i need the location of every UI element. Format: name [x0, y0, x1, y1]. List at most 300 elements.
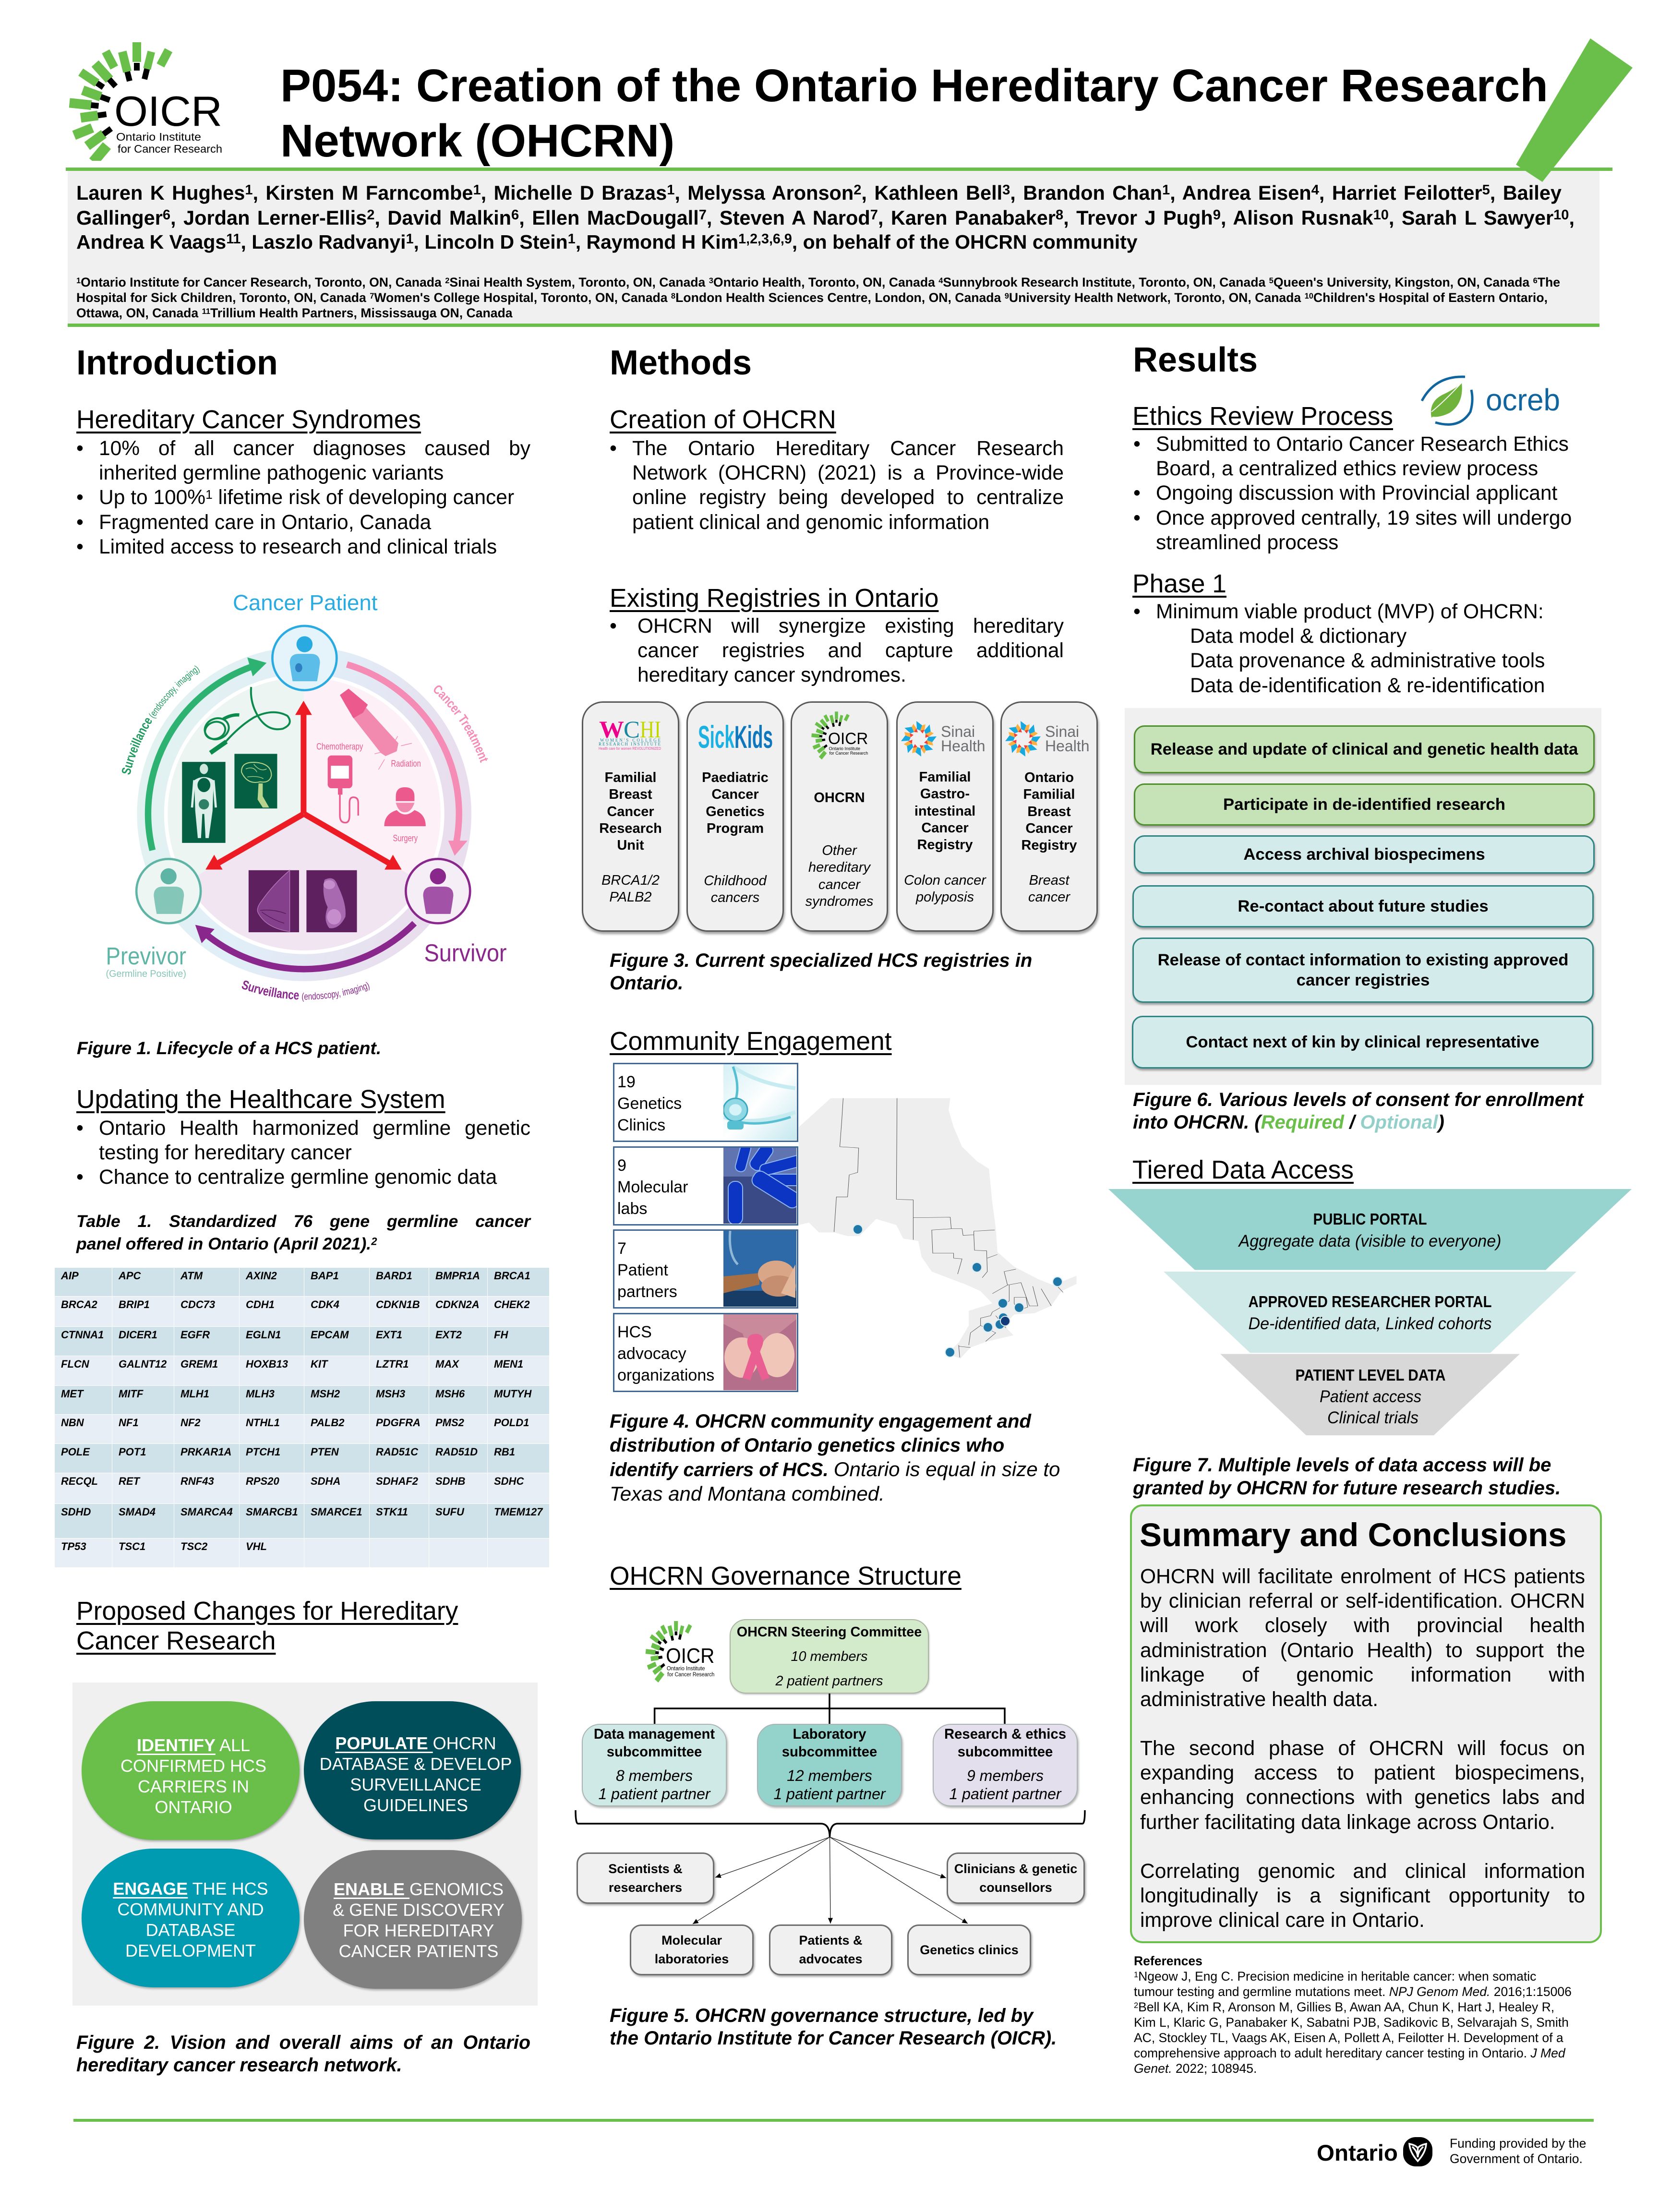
consent: contact information: Release of contact information to existing approved	[1158, 951, 1568, 969]
connector: committee tree	[655, 1693, 1005, 1724]
card: OHCRN	[791, 701, 888, 932]
caption: figure 3: Figure 3. Current specialized HCS registries in	[610, 950, 1032, 971]
references: 1Ngeow J, Eng C. Precision medicine in heritable cancer: when somatic	[1134, 1969, 1536, 1984]
heading: Tiered Data Access: Tiered Data Access	[1132, 1156, 1354, 1184]
bullet list: registries	[610, 614, 1064, 688]
table: 76 gene germline panel: SDHAF2	[376, 1475, 418, 1487]
bullet list: phase 1: Data model & dictionary	[1190, 625, 1407, 648]
card: Ontario familial breast cancer registry	[1000, 701, 1098, 932]
aim: identify: CONFIRMED HCS	[120, 1756, 266, 1776]
table: 76 gene germline panel: GALNT12	[119, 1358, 167, 1370]
heading: Existing Registries: Existing Registries in Ontario	[610, 584, 938, 613]
text: registry name: Cancer	[711, 787, 759, 802]
logo: OICR small: OICR	[828, 730, 868, 748]
table: 76 gene germline panel: SDHB	[435, 1475, 465, 1487]
table: 76 gene germline panel: AXIN2	[246, 1270, 277, 1282]
caption: figure 6: Figure 6. Various levels of consent for enrollment	[1133, 1089, 1584, 1110]
table: 76 gene germline panel: SMARCA4	[180, 1506, 233, 1518]
label: Germline Positive: (Germline Positive)	[106, 969, 186, 979]
table: 76 gene germline panel: NF1	[119, 1417, 139, 1429]
table: 76 gene germline panel: RAD51D	[435, 1446, 478, 1458]
table: 76 gene germline panel: POLE	[61, 1446, 90, 1458]
caption: figure 6: into OHCRN. (Required / Optional)	[1133, 1112, 1444, 1133]
image: pink ribbon	[723, 1314, 796, 1390]
table: 76 gene germline panel: BRCA1	[494, 1270, 530, 1282]
text: registry focus: hereditary	[808, 860, 870, 875]
text: registry name	[898, 769, 992, 854]
references: 2Bell KA, Kim R, Aronson M, Gillies B, Awan AA, Chun K, Hart J, Healey R,	[1134, 2000, 1554, 2014]
text: count: Molecular	[617, 1178, 688, 1196]
text: paragraph 3	[1140, 1859, 1585, 1933]
table: 76 gene germline panel: CDKN1B	[376, 1298, 420, 1310]
text: registry name: Genetics	[706, 804, 765, 819]
table: 76 gene germline panel: MITF	[119, 1388, 143, 1400]
image: stethoscope	[723, 1064, 796, 1140]
authors	[76, 181, 1575, 253]
text: registry name: Familial	[605, 770, 657, 785]
caption: table 1: Table 1. Standardized 76 gene germline cancer	[76, 1212, 530, 1231]
box: steering committee: 2 patient partners	[775, 1673, 883, 1689]
label: cancer treatment: Cancer Treatment	[434, 685, 488, 763]
text: paragraph 1	[1140, 1564, 1585, 1712]
bullet list: syndromes: •	[76, 536, 84, 558]
consent: de-identified research: Participate in de-identified research	[1223, 795, 1505, 814]
box: research and ethics: Research & ethics	[944, 1726, 1066, 1742]
author panel background	[68, 171, 1599, 324]
title: P054: Creation of the Ontario Hereditary Cancer Research	[280, 60, 1548, 111]
text: registry name: Ontario	[1024, 770, 1074, 785]
label: surveillance bottom: Surveillance	[242, 980, 299, 999]
section heading: Methods: Methods	[610, 344, 752, 382]
logo: OICR small	[792, 708, 887, 760]
box: research and ethics: subcommittee	[958, 1744, 1053, 1760]
funnel: patient level data: Clinical trials	[1327, 1408, 1419, 1427]
table: 76 gene germline panel: VHL	[246, 1540, 267, 1552]
bullet list: ethics	[1133, 432, 1594, 555]
logo: OICR governance: for Cancer Research	[667, 1672, 714, 1678]
box: laboratory: 12 members	[787, 1767, 872, 1784]
table: 76 gene germline panel: AIP	[61, 1270, 79, 1282]
panel: figure 2 aims	[72, 1683, 538, 2006]
aim: enable	[304, 1850, 522, 1989]
logo: OICR governance: Ontario Institute	[667, 1666, 705, 1672]
logo: OICR small: Ontario Institute	[829, 746, 860, 751]
footer: funding statement: Government of Ontario.	[1450, 2152, 1583, 2166]
footer: funding statement: Funding provided by the	[1450, 2136, 1586, 2151]
bullet list: creation: online registry being developed to centralize	[632, 486, 1064, 509]
logo: Sinai Health: Health	[941, 737, 985, 755]
text: count	[617, 1155, 688, 1220]
table: 76 gene germline panel: FLCN	[61, 1358, 89, 1370]
table: 76 gene germline panel	[55, 1268, 549, 1567]
text: registry name: Registry	[917, 837, 973, 853]
consent: release clinical data	[1134, 725, 1595, 773]
text: count	[617, 1322, 714, 1386]
caption: figure 7: Figure 7. Multiple levels of data access will be	[1133, 1455, 1551, 1476]
card: familial breast cancer research unit	[582, 701, 679, 932]
arrow: pink treatment arc	[347, 664, 468, 856]
table: 76 gene germline panel: TMEM127	[494, 1506, 542, 1518]
caption: figure 7: granted by OHCRN for future research studies.	[1133, 1478, 1561, 1499]
aim: engage: COMMUNITY AND	[117, 1899, 264, 1919]
logo: OICR governance: OICR	[666, 1644, 714, 1667]
table: 76 gene germline panel: MEN1	[494, 1358, 523, 1370]
title	[280, 60, 1548, 167]
text: registry name: Registry	[1021, 838, 1077, 853]
bullet list: registries: OHCRN will synergize existing hereditary	[637, 615, 1064, 637]
table: 76 gene germline panel: EPCAM	[311, 1329, 349, 1341]
box: scientists: researchers	[609, 1880, 682, 1894]
map: Ontario genetics clinics	[799, 1098, 1077, 1358]
table: 76 gene germline panel: EXT1	[376, 1329, 402, 1341]
table: 76 gene germline panel: RPS20	[246, 1475, 279, 1487]
icon: green leaf accent	[1516, 38, 1633, 182]
label: endoscopy imaging left: (endoscopy, imaging)	[149, 665, 200, 719]
funnel: patient level data: Patient access	[1320, 1387, 1421, 1406]
heading: Proposed Changes	[76, 1597, 458, 1655]
table: 76 gene germline panel: LZTR1	[376, 1358, 409, 1370]
bullet list: creation: patient clinical and genomic information	[632, 511, 989, 534]
text: registry focus: cancer	[818, 877, 860, 892]
bullet list: creation: The Ontario Hereditary Cancer Research	[632, 437, 1064, 460]
logo: Sinai Health: Health	[1045, 737, 1090, 755]
text: registry name: Breast	[609, 787, 652, 802]
text: paragraph 1: linkage of genomic information with	[1140, 1664, 1585, 1686]
image: holding hands	[723, 1231, 796, 1307]
label: Surgery: Surgery	[393, 833, 418, 844]
table: 76 gene germline panel: KIT	[311, 1358, 327, 1370]
heading: Ethics Review Process: Ethics Review Process	[1132, 402, 1393, 431]
table: 76 gene germline panel: BRIP1	[119, 1298, 150, 1310]
table: 76 gene germline panel: CDK4	[311, 1298, 339, 1310]
text: count: Genetics	[617, 1094, 682, 1113]
funnel: approved researcher portal: APPROVED RESEARCHER PORTAL	[1248, 1293, 1492, 1310]
box: genetics clinics	[907, 1924, 1031, 1975]
image: kidney scan	[306, 870, 357, 932]
logo: WCHRI: WOMEN'S COLLEGE	[600, 738, 661, 743]
consent: next of kin	[1132, 1016, 1593, 1069]
text: registry name: Research	[599, 821, 662, 836]
footer: Ontario wordmark: Ontario	[1317, 2140, 1398, 2166]
box: data management: 1 patient partner	[598, 1785, 710, 1803]
table: 76 gene germline panel: CTNNA1	[61, 1329, 104, 1341]
text: registry name: Unit	[617, 838, 644, 853]
panel: figure 6 consent	[1125, 708, 1601, 1085]
authors: Lauren K Hughes1, Kirsten M Farncombe1, Michelle D Brazas1, Melyssa Aronson2, Kathleen Bell3, Brandon Chan1, Andrea Eisen4, Harriet Feilotter5, Bailey	[76, 181, 1562, 204]
logo: WCHRI: W	[599, 716, 624, 743]
table: 76 gene germline panel: MSH3	[376, 1388, 405, 1400]
box: genetics clinics: Genetics clinics	[920, 1942, 1019, 1957]
text: paragraph 2: further facilitating data linkage across Ontario.	[1140, 1811, 1555, 1834]
table: 76 gene germline panel: ATM	[180, 1270, 203, 1282]
caption: figure 4: identify carriers of HCS. Ontario is equal in size to	[610, 1458, 1060, 1480]
text: paragraph 1: by clinician referral or self-identification. OHCRN	[1140, 1590, 1585, 1612]
bullet list: registries: cancer registries and capture additional	[637, 639, 1064, 662]
table: 76 gene germline panel: TP53	[61, 1540, 86, 1552]
caption: figure 4: distribution of Ontario genetics clinics who	[610, 1435, 1004, 1456]
logo: OICR small: for Cancer Research	[830, 751, 868, 756]
bullet list: phase 1: Data de-identification & re-identification	[1190, 674, 1545, 697]
logo: ocreb	[1414, 372, 1567, 430]
bullet list: syndromes: Up to 100%1 lifetime risk of developing cancer	[99, 486, 514, 509]
icon: surgeon	[384, 787, 426, 826]
table: 76 gene germline panel: APC	[119, 1270, 141, 1282]
text: count: Clinics	[617, 1116, 665, 1134]
table: 76 gene germline panel: SDHD	[61, 1506, 91, 1518]
bullet list: healthcare system: •	[76, 1117, 84, 1140]
label: Chemotherapy: Chemotherapy	[316, 742, 363, 752]
sector: surveillance	[168, 677, 304, 882]
text: registry name: Program	[707, 821, 764, 836]
box: clinicians: Clinicians & genetic	[954, 1862, 1077, 1876]
table: 76 gene germline panel: CDH1	[246, 1298, 275, 1310]
bullet list: healthcare system: Ontario Health harmonized germline genetic	[99, 1117, 530, 1140]
text: count: advocacy	[617, 1345, 686, 1363]
text: registry focus: Breast	[1029, 873, 1069, 888]
text: registry focus: cancer	[1028, 890, 1070, 905]
bullet list: syndromes: •	[76, 437, 84, 460]
header: title band	[66, 60, 1612, 327]
text: registry name: intestinal	[914, 804, 975, 819]
text: count: labs	[617, 1200, 647, 1218]
funnel: approved researcher portal: De-identified data, Linked cohorts	[1248, 1314, 1492, 1333]
caption: figure 3: Ontario.	[610, 973, 683, 994]
consent: biospecimens	[1134, 835, 1595, 874]
heading: Hereditary Cancer Syndromes: Hereditary Cancer Syndromes	[76, 406, 421, 434]
logo: OICR: OICR	[114, 87, 222, 135]
text: registry name: Breast	[1027, 804, 1071, 819]
card: familial gastro-intestinal cancer registry	[896, 701, 994, 932]
box: patients: Patients &	[799, 1933, 863, 1948]
caption: figure 4	[610, 1409, 1060, 1506]
box: laboratory: 1 patient partner	[773, 1785, 886, 1803]
image: DNA tubes	[723, 1148, 796, 1224]
funnel: patient level data	[1220, 1354, 1520, 1435]
caption: figure 1: Figure 1. Lifecycle of a HCS patient.	[77, 1038, 381, 1058]
text: count: 9	[617, 1156, 626, 1175]
logo: WCHRI	[583, 708, 678, 760]
bullet list: syndromes: inherited germline pathogenic variants	[99, 462, 444, 484]
text: registry focus: cancers	[711, 890, 759, 905]
table: 76 gene germline panel: RB1	[494, 1446, 515, 1458]
table: 76 gene germline panel: NF2	[180, 1417, 201, 1429]
aim: enable: FOR HEREDITARY	[343, 1921, 494, 1940]
table: 76 gene germline panel: HOXB13	[246, 1358, 288, 1370]
chart: lifecycle of a HCS patient	[106, 590, 507, 1002]
authors: Andrea K Vaags11, Laszlo Radvanyi1, Lincoln D Stein1, Raymond H Kim1,2,3,6,9, on behalf of the OHCRN community	[76, 231, 1138, 253]
logo: OICR: for Cancer Research	[118, 143, 222, 155]
box: steering committee: OHCRN Steering Committee	[737, 1624, 922, 1640]
table: 76 gene germline panel: MLH1	[180, 1388, 209, 1400]
text: registry focus	[583, 872, 678, 906]
label: Cancer Patient: Cancer Patient	[233, 590, 378, 615]
heading: Community Engagement: Community Engagement	[610, 1027, 892, 1056]
text: registry name	[583, 769, 678, 854]
heading: Governance: OHCRN Governance Structure	[610, 1562, 962, 1590]
aim: engage: DATABASE	[146, 1920, 235, 1940]
box: data management: 8 members	[616, 1767, 693, 1784]
consent: contact information: cancer registries	[1297, 971, 1430, 989]
footer: funding statement	[1450, 2136, 1586, 2166]
table: 76 gene germline panel: POT1	[119, 1446, 146, 1458]
caption: figure 2: Figure 2. Vision and overall aims of an Ontario	[76, 2032, 530, 2053]
text: count: organizations	[617, 1366, 714, 1384]
text: count	[617, 1238, 677, 1303]
label: Survivor: Survivor	[424, 939, 507, 966]
aim: identify: CARRIERS IN	[138, 1777, 249, 1796]
table: 76 gene germline panel: RET	[119, 1475, 140, 1487]
table: 76 gene germline panel: RNF43	[180, 1475, 214, 1487]
text: registry name: Cancer	[607, 804, 654, 819]
logo: OICR governance	[646, 1621, 714, 1683]
table: 76 gene germline panel: DICER1	[119, 1329, 157, 1341]
logo: WCHRI: RESEARCH INSTITUTE	[599, 742, 661, 746]
bullet list: creation	[610, 436, 1064, 535]
affiliations: Hospital for Sick Children, Toronto, ON, Canada 7Women's College Hospital, Toronto, ON, Canada 8London Health Sciences Centre, London, ON, Canada 9University Health Network, Toronto, ON, Canada 10Children's Hospital of Eastern Ontario,	[76, 290, 1548, 305]
table: 76 gene germline panel: PRKAR1A	[180, 1446, 231, 1458]
box: research and ethics	[933, 1724, 1078, 1806]
aim: enable: & GENE DISCOVERY	[333, 1900, 505, 1920]
text: count: partners	[617, 1283, 677, 1301]
icon: Ontario trillium	[1403, 2137, 1432, 2166]
text: registry focus: Childhood	[704, 873, 767, 889]
icon: previvor	[136, 859, 201, 923]
logo: Sinai Health	[898, 708, 992, 760]
text: paragraph 1: will work closely with provincial health	[1140, 1614, 1585, 1637]
text: paragraph 3: longitudinally is a significant opportunity to	[1140, 1885, 1585, 1907]
table: 76 gene germline panel: CDC73	[180, 1298, 215, 1310]
icon: survivor	[406, 859, 470, 923]
table: 76 gene germline panel: SDHC	[494, 1475, 524, 1487]
box: patients	[769, 1924, 892, 1975]
bullet list: ethics: Once approved centrally, 19 sites will undergo	[1156, 507, 1572, 529]
map markers	[853, 1225, 1062, 1357]
bullet list: ethics: Board, a centralized ethics review process	[1156, 457, 1538, 480]
table: 76 gene germline panel: PALB2	[311, 1417, 345, 1429]
table: 76 gene germline panel: BARD1	[376, 1270, 412, 1282]
aim: populate: DATABASE & DEVELOP	[320, 1754, 512, 1774]
table: 76 gene germline panel: EGLN1	[246, 1329, 281, 1341]
text: registry focus: polyposis	[916, 890, 974, 905]
box: research and ethics: 1 patient partner	[949, 1785, 1061, 1803]
logo: WCHRI: C	[624, 716, 640, 743]
panel: 7 patient partners	[613, 1229, 798, 1309]
panel: 9 molecular labs	[613, 1146, 798, 1226]
box: scientists: Scientists &	[608, 1862, 683, 1876]
aim: populate	[304, 1701, 521, 1839]
consent: contact information	[1132, 938, 1594, 1003]
caption: figure 5	[610, 2005, 1057, 2050]
box: scientists	[577, 1852, 714, 1904]
logo: Sinai Health	[1002, 708, 1096, 760]
funnel: public portal: Aggregate data (visible to everyone)	[1238, 1232, 1502, 1250]
icon: cancer patient	[272, 626, 337, 690]
caption: figure 6	[1133, 1089, 1584, 1134]
funnel: approved researcher portal	[1164, 1272, 1576, 1353]
text: paragraph 1: administrative health data.	[1140, 1688, 1378, 1711]
table: 76 gene germline panel: RECQL	[61, 1475, 98, 1487]
caption: figure 3	[610, 950, 1032, 995]
text: registry focus: syndromes	[805, 894, 873, 909]
text: count: Patient	[617, 1261, 668, 1279]
panel: 19 genetics clinics	[613, 1063, 798, 1142]
text: registry focus: PALB2	[609, 890, 652, 905]
table: 76 gene germline panel: CDKN2A	[435, 1298, 480, 1310]
aim: identify: ONTARIO	[155, 1797, 232, 1817]
box: data management	[582, 1724, 727, 1806]
logo: Sinai Health: Sinai	[941, 723, 975, 740]
table: 76 gene germline panel: POLD1	[494, 1417, 529, 1429]
bullet list: phase 1: Minimum viable product (MVP) of OHCRN:	[1156, 601, 1544, 623]
image: breast scan	[249, 870, 299, 932]
caption: figure 4: Figure 4. OHCRN community engagement and	[610, 1411, 1031, 1432]
text: registry focus	[1002, 872, 1096, 906]
bullet list: syndromes: Fragmented care in Ontario, Canada	[99, 511, 431, 534]
consent: release clinical data: Release and update of clinical and genetic health data	[1151, 740, 1578, 758]
caption: figure 4: Texas and Montana combined.	[610, 1482, 885, 1505]
bullet list: creation: Network (OHCRN) (2021) is a Province-wide	[632, 462, 1064, 484]
bullet list: phase 1: •	[1133, 601, 1141, 623]
logo: OICR	[69, 42, 222, 165]
caption: figure 2: hereditary cancer research network.	[76, 2055, 402, 2076]
section heading: Introduction: Introduction	[76, 344, 278, 382]
aim: populate: SURVEILLANCE	[350, 1775, 481, 1794]
consent: re-contact: Re-contact about future studies	[1238, 897, 1489, 915]
text: count: 7	[617, 1239, 626, 1258]
bullet list: syndromes: •	[76, 511, 84, 534]
text: registry focus	[688, 873, 782, 907]
box: research and ethics: 9 members	[967, 1767, 1044, 1784]
heading: summary: Summary and Conclusions	[1140, 1516, 1567, 1553]
bullet list: ethics: •	[1133, 507, 1141, 529]
bullet list: healthcare system: testing for hereditary cancer	[99, 1142, 352, 1164]
box: patients: advocates	[799, 1952, 863, 1966]
table: 76 gene germline panel: RAD51C	[376, 1446, 418, 1458]
bullet list: healthcare system	[76, 1117, 530, 1189]
affiliations: 1Ontario Institute for Cancer Research, Toronto, ON, Canada 2Sinai Health System, Toronto, ON, Canada 3Ontario Health, Toronto, ON, Canada 4Sunnybrook Research Institute, Toronto, ON, Canada 5Queen's University, Kingston, ON, Canada 6The	[76, 275, 1560, 289]
aim: engage: ENGAGE THE HCS	[113, 1879, 268, 1899]
header rule bottom	[68, 324, 1599, 327]
caption: table 1	[76, 1212, 531, 1253]
table: 76 gene germline panel: MLH3	[246, 1388, 275, 1400]
text: registry name: Gastro-	[920, 786, 970, 802]
heading: Proposed Changes: Cancer Research	[76, 1627, 276, 1655]
logo: Sinai Health: Sinai	[1045, 723, 1079, 740]
table: 76 gene germline panel: NBN	[61, 1417, 84, 1429]
text: registry focus	[792, 842, 887, 910]
text: registry focus: Other	[822, 843, 857, 858]
text: registry focus: BRCA1/2	[601, 873, 660, 888]
bullet list: healthcare system: •	[76, 1166, 84, 1189]
box: steering committee	[730, 1619, 929, 1694]
heading: Updating the Healthcare System: Updating the Healthcare System	[76, 1085, 445, 1114]
heading: Phase 1: Phase 1	[1132, 570, 1226, 598]
text: registry name: Familial	[1023, 787, 1075, 802]
caption: figure 5: the Ontario Institute for Cancer Research (OICR).	[610, 2028, 1057, 2049]
table: 76 gene germline panel: TSC2	[180, 1540, 207, 1552]
bullet list: ethics: •	[1133, 433, 1141, 456]
arrows: stakeholder groups	[693, 1837, 968, 1924]
table: 76 gene germline panel: SMAD4	[119, 1506, 156, 1518]
table: 76 gene germline panel: MAX	[435, 1358, 459, 1370]
bullet list: registries: hereditary cancer syndromes.	[637, 664, 906, 686]
bullet list: phase 1: Data provenance & administrative tools	[1190, 649, 1545, 672]
arrows: red lifecycle	[205, 701, 402, 869]
references: tumour testing and germline mutations meet. NPJ Genom Med. 2016;1:15006	[1134, 1984, 1572, 1999]
text: paragraph 1: OHCRN will facilitate enrolment of HCS patients	[1140, 1565, 1585, 1588]
text: registry name: OHCRN	[814, 790, 865, 805]
logo: OICR: Ontario Institute	[116, 131, 201, 143]
